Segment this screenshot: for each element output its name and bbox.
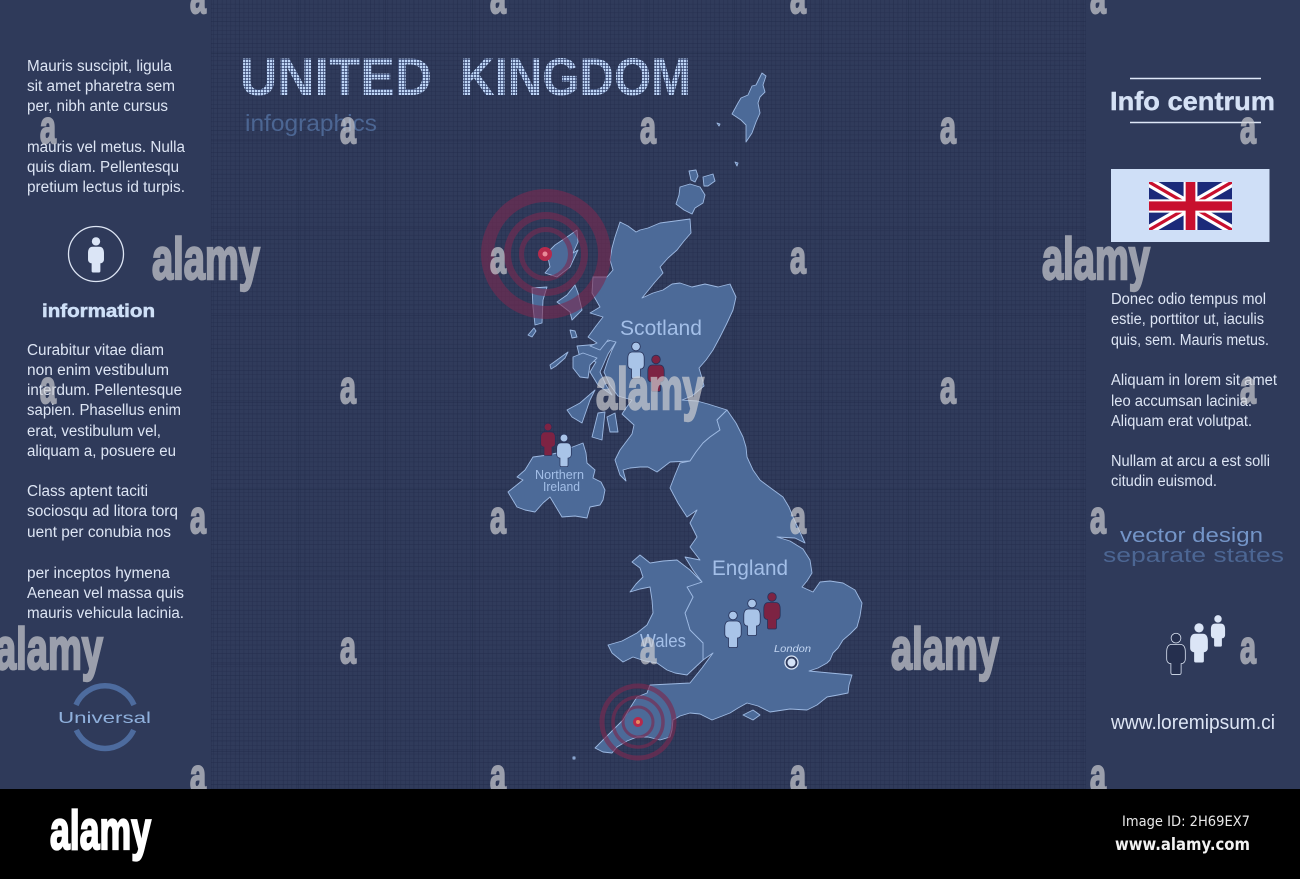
left text block 1: sit amet pharetra sem: [27, 78, 175, 95]
title: UNITED: [240, 48, 432, 107]
watermarks: a: [40, 361, 56, 413]
subtitle: infographics: [245, 110, 377, 136]
watermarks: a: [490, 491, 506, 543]
right text block: leo accumsan lacinia.: [1111, 393, 1252, 410]
right text block: citudin euismod.: [1111, 473, 1217, 490]
right text block: Aliquam in lorem sit amet: [1111, 372, 1278, 389]
London marker: London: [774, 643, 811, 655]
footer website: www.alamy.com: [1115, 835, 1250, 855]
watermarks: a: [1240, 621, 1256, 673]
islands: Outer Hebrides: [528, 230, 578, 337]
watermarks: a: [1090, 749, 1106, 801]
right text block: quis, sem. Mauris metus.: [1111, 332, 1269, 349]
left text block 2: aliquam a, posuere eu: [27, 443, 176, 460]
islands: Orkney: [676, 170, 715, 214]
heading: Info centrum: Info centrum: [1110, 86, 1275, 116]
title: [240, 48, 691, 107]
footer bar: [0, 789, 1300, 879]
grid panel: [211, 0, 1086, 789]
logo: Universal: [58, 686, 151, 749]
caption: vector design: vector design: [1120, 525, 1263, 547]
left text block 1: pretium lectus id turpis.: [27, 179, 185, 196]
left text block 2: non enim vestibulum: [27, 362, 169, 379]
people: Northern Ireland: [541, 423, 571, 467]
title: KINGDOM: [460, 48, 691, 107]
target: Cornwall: [602, 686, 674, 758]
left text block 1: per, nibh ante cursus: [27, 98, 168, 115]
islands: Wight and Scilly: [573, 710, 760, 759]
label: Wales: Wales: [640, 631, 686, 651]
website: www.loremipsum.ci: [1110, 712, 1275, 734]
islands: Shetland: [717, 73, 766, 166]
left text block 2: Class aptent taciti: [27, 483, 148, 500]
left text block 2: Aenean vel massa quis: [27, 585, 184, 602]
label: Northern Ireland: Northern: [535, 468, 584, 482]
watermarks: a: [340, 621, 356, 673]
people: England: [725, 593, 780, 648]
watermarks: a: [40, 101, 56, 153]
left text block 2: interdum. Pellentesque: [27, 382, 182, 399]
watermarks: a: [1090, 491, 1106, 543]
left text block 1: mauris vel metus. Nulla: [27, 139, 185, 156]
caption: separate states: separate states: [1103, 545, 1284, 567]
right text block: Donec odio tempus mol: [1111, 291, 1266, 308]
watermarks: a: [790, 749, 806, 801]
watermarks: alamy: [152, 227, 260, 292]
icon: information person: [68, 226, 124, 282]
watermarks: a: [490, 749, 506, 801]
watermarks: a: [940, 361, 956, 413]
watermarks: a: [640, 621, 656, 673]
label: Northern Ireland: Ireland: [543, 480, 580, 494]
watermarks: a: [640, 101, 656, 153]
right text block: Nullam at arcu a est solli: [1111, 453, 1270, 470]
watermarks: alamy: [596, 357, 704, 422]
watermarks: a: [940, 101, 956, 153]
region: England: [595, 410, 862, 753]
image id: Image ID: 2H69EX7: [1122, 814, 1250, 830]
watermarks: a: [340, 361, 356, 413]
watermarks: a: [1240, 361, 1256, 413]
left text block 2: mauris vehicula lacinia.: [27, 605, 184, 622]
left text block 2: per inceptos hymena: [27, 565, 170, 582]
watermarks: a: [340, 101, 356, 153]
watermarks: a: [1240, 101, 1256, 153]
left text block 2: Curabitur vitae diam: [27, 342, 164, 359]
left text block 2: uent per conubia nos: [27, 524, 171, 541]
left text block 2: [27, 342, 184, 622]
left text block 1: [27, 58, 185, 196]
watermarks: alamy: [891, 617, 999, 682]
flag panel: [1111, 169, 1270, 242]
heading: information: information: [42, 301, 155, 321]
label: Scotland: Scotland: [620, 317, 702, 340]
watermarks: a: [790, 231, 806, 283]
islands: Kintyre and Arran: [592, 412, 618, 440]
left text block 2: erat, vestibulum vel,: [27, 423, 161, 440]
watermarks: a: [190, 749, 206, 801]
watermarks: a: [490, 231, 506, 283]
region: Wales: [608, 555, 703, 675]
watermarks: a: [790, 491, 806, 543]
left text block 2: sociosqu ad litora torq: [27, 503, 178, 520]
left text block 1: quis diam. Pellentesqu: [27, 159, 179, 176]
region: Scotland: [588, 219, 736, 481]
left text block 1: Mauris suscipit, ligula: [27, 58, 172, 75]
label: England: England: [712, 557, 788, 580]
label: Northern Ireland: [535, 468, 584, 494]
region: Argyll coast: [577, 340, 616, 395]
people: Scotland: [628, 342, 664, 392]
icon: three people: [1167, 615, 1225, 674]
watermarks: alamy: [1042, 227, 1150, 292]
right text block: estie, porttitor ut, iaculis: [1111, 311, 1264, 328]
logo: Universal: Universal: [58, 710, 151, 727]
right text block: [1111, 291, 1278, 490]
watermarks: a: [190, 491, 206, 543]
footer logo: alamy: [50, 799, 151, 861]
map of the United Kingdom: [508, 73, 862, 759]
left text block 2: sapien. Phasellus enim: [27, 402, 181, 419]
target: Hebrides: [488, 196, 604, 312]
right text block: Aliquam erat volutpat.: [1111, 413, 1252, 430]
region: Northern Ireland: [508, 443, 605, 518]
London marker: [774, 643, 811, 669]
islands: Inner Hebrides: [550, 285, 597, 423]
